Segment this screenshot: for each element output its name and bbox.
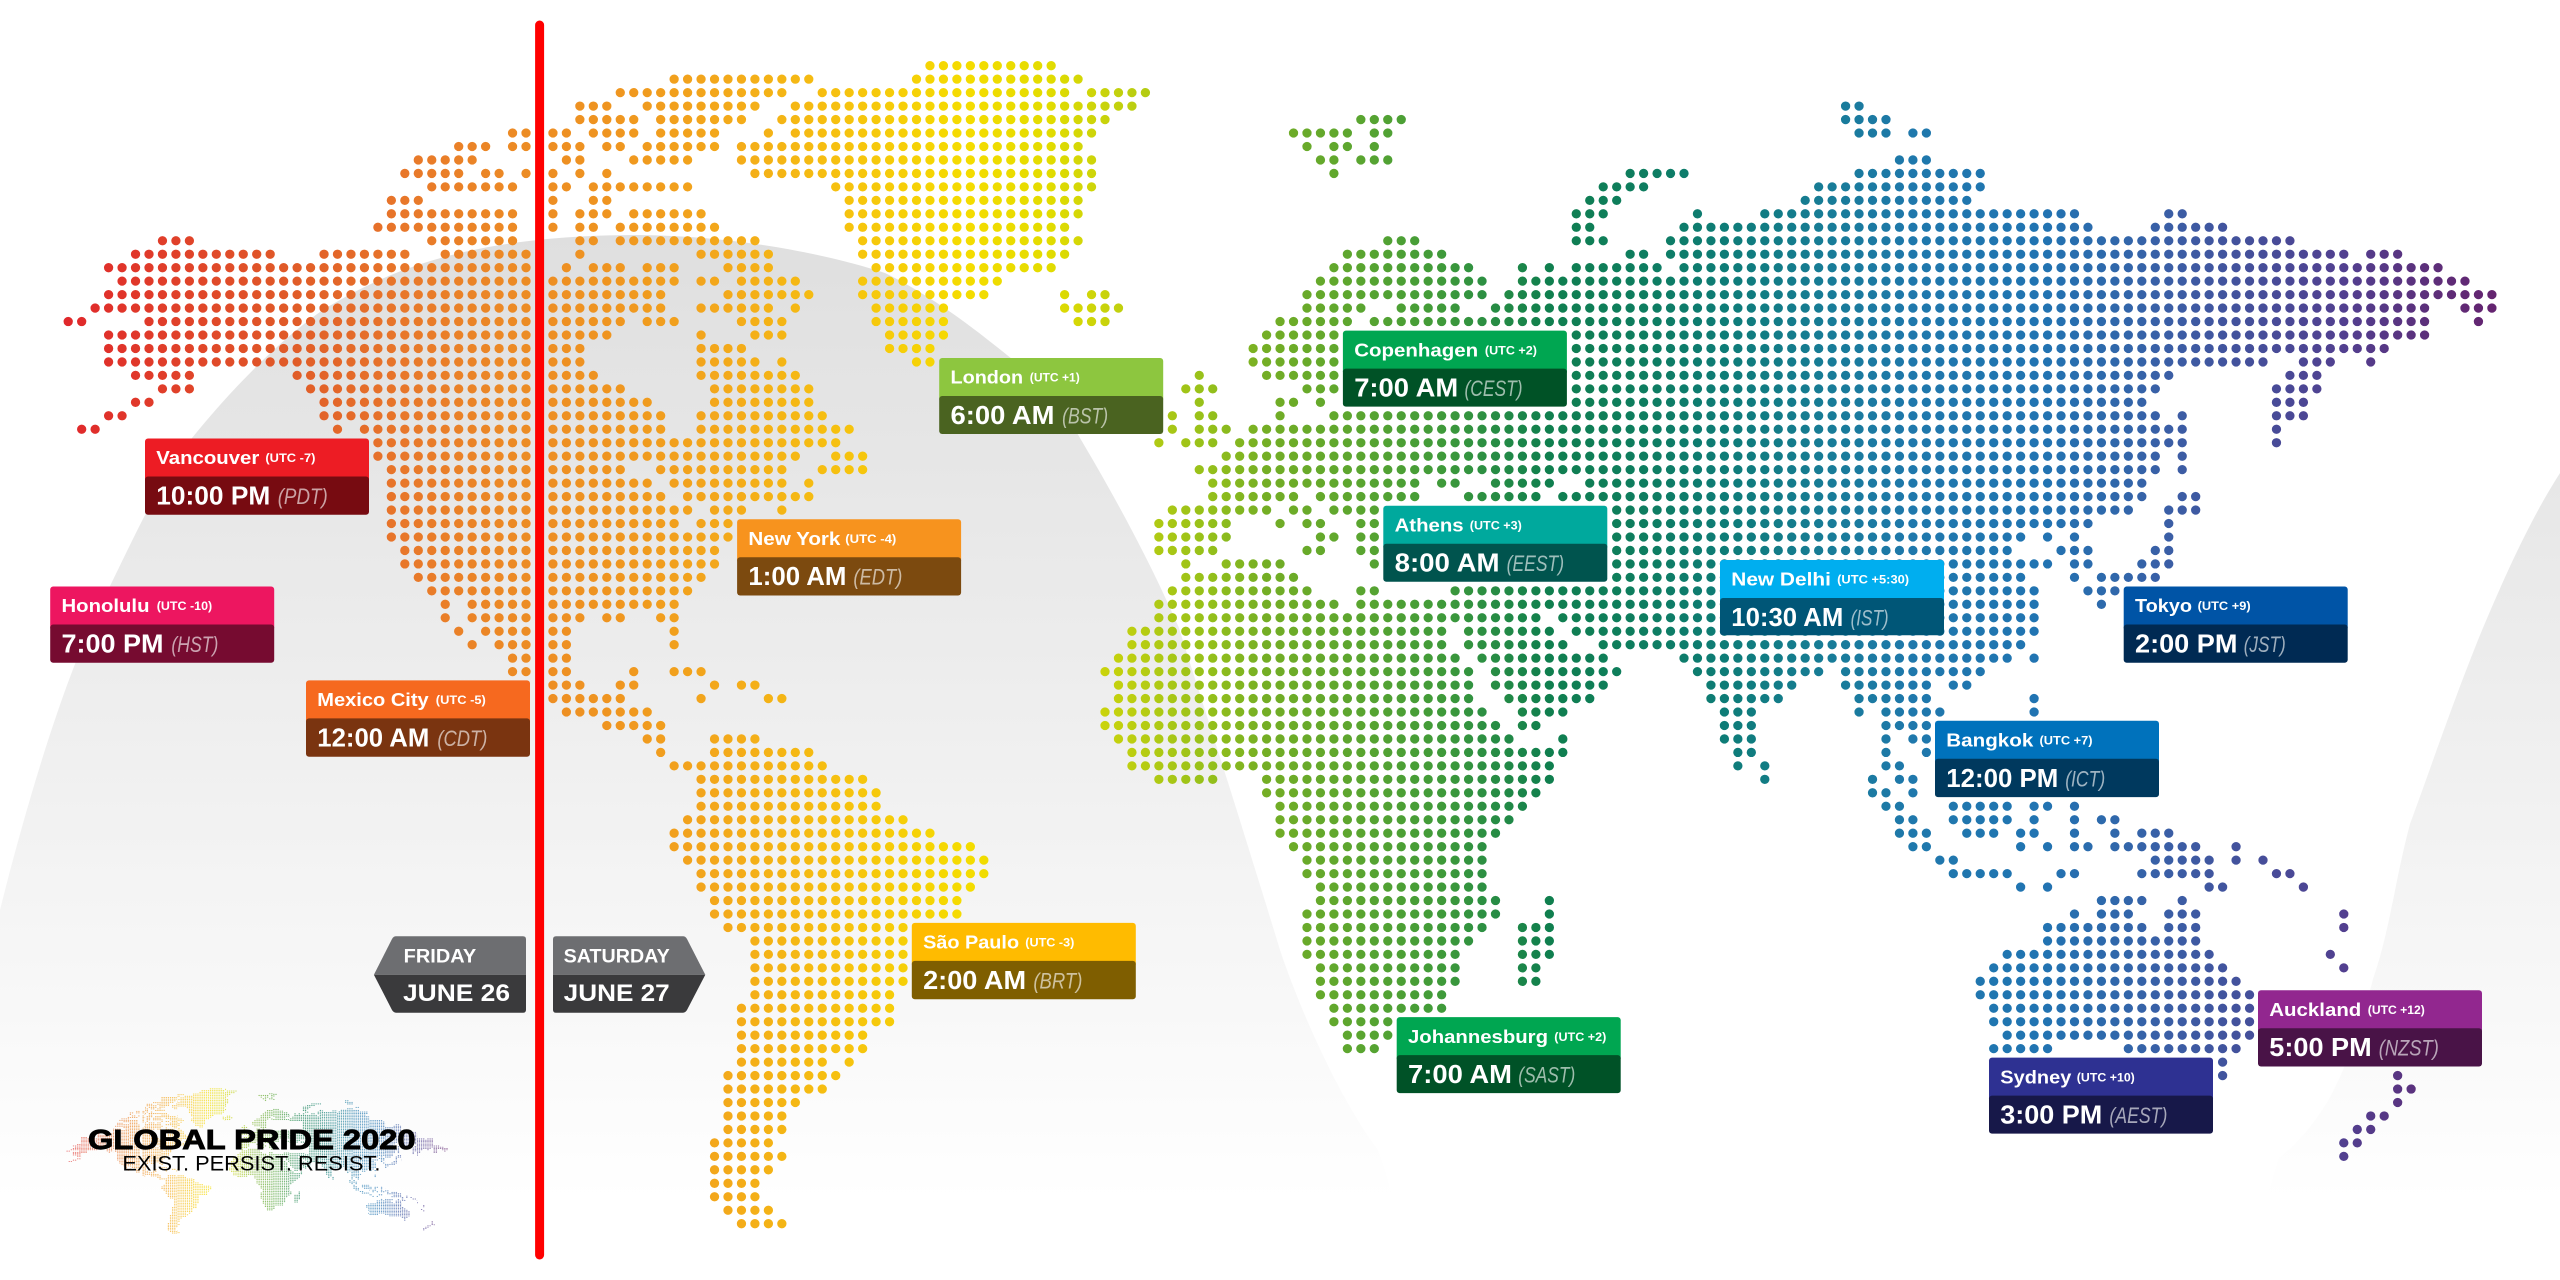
city header (1343, 331, 1567, 375)
label: Vancouver (145, 438, 369, 515)
local time (1397, 1055, 1621, 1093)
city header: (UTC +9) (2198, 599, 2251, 613)
city header: (UTC -7) (265, 451, 315, 465)
logo tagline: EXIST. PERSIST. RESIST. (122, 1153, 380, 1176)
background: daylight arc left (0, 235, 1420, 1280)
city header: Copenhagen (1354, 339, 1478, 360)
local time: 2:00 PM (2135, 628, 2237, 658)
local time: (HST) (171, 632, 218, 657)
label: Athens (1383, 506, 1607, 582)
city header: Mexico City (317, 689, 429, 710)
local time: (BRT) (1033, 968, 1082, 993)
local time: (NZST) (2379, 1036, 2439, 1061)
city header: (UTC +10) (2077, 1070, 2135, 1084)
city header (912, 923, 1136, 967)
local time (1989, 1096, 2213, 1134)
local time: (PDT) (278, 484, 328, 509)
date tag: Saturday June 27: SATURDAY (564, 946, 670, 967)
label: New York (737, 519, 961, 596)
city header: Auckland (2269, 999, 2361, 1020)
label: Mexico City (306, 680, 530, 757)
local time: 10:30 AM (1731, 602, 1843, 632)
local time: (SAST) (1518, 1063, 1575, 1088)
city header: Tokyo (2135, 595, 2192, 616)
local time: (EEST) (1507, 551, 1564, 576)
city header: Athens (1395, 514, 1464, 535)
local time (912, 961, 1136, 999)
city header: New York (748, 528, 841, 549)
label: Tokyo (2124, 586, 2348, 663)
local time: 7:00 PM (62, 628, 164, 658)
local time: 1:00 AM (748, 561, 846, 591)
city header: Johannesburg (1408, 1026, 1548, 1047)
local time: 7:00 AM (1354, 373, 1458, 403)
local time: (ICT) (2065, 766, 2105, 791)
label: Bangkok (1935, 721, 2159, 797)
local time: 10:00 PM (156, 480, 270, 510)
logo title: GLOBAL PRIDE 2020 (88, 1124, 416, 1155)
city header (2124, 586, 2348, 630)
city header (737, 519, 961, 563)
date tag: Saturday June 27 (553, 936, 705, 1013)
city header (145, 438, 369, 482)
local time (1383, 544, 1607, 582)
city header: (UTC +5:30) (1837, 573, 1909, 587)
city header (1397, 1017, 1621, 1061)
logo: Global Pride 2020 (65, 1087, 449, 1238)
city header: São Paulo (923, 932, 1019, 953)
city header (939, 358, 1163, 402)
city header: Sydney (2000, 1066, 2072, 1087)
city header: London (951, 367, 1023, 388)
local time: (BST) (1062, 404, 1108, 428)
city header: (UTC +3) (1470, 518, 1522, 532)
label: Sydney (1989, 1058, 2213, 1134)
label: São Paulo (912, 923, 1136, 999)
local time: (JST) (2244, 632, 2286, 657)
local time: 12:00 PM (1946, 763, 2058, 793)
city header: New Delhi (1731, 569, 1831, 590)
local time: 6:00 AM (951, 400, 1055, 430)
local time (1935, 759, 2159, 797)
city header (50, 586, 274, 630)
date tag: Saturday June 27: JUNE 27 (564, 980, 670, 1007)
local time: 2:00 AM (923, 965, 1026, 995)
local time: (CEST) (1465, 376, 1523, 401)
city header (2258, 990, 2482, 1034)
city header: (UTC +2) (1554, 1030, 1606, 1044)
local time (1720, 598, 1944, 635)
city header: (UTC +1) (1030, 371, 1080, 385)
city header (1383, 506, 1607, 550)
city header: Honolulu (62, 595, 150, 616)
local time (1343, 369, 1567, 407)
city header (1720, 560, 1944, 604)
city header: (UTC +12) (2368, 1003, 2425, 1017)
local time: 3:00 PM (2000, 1100, 2102, 1130)
date tag: Friday June 26: FRIDAY (404, 946, 477, 967)
label: Auckland (2258, 990, 2482, 1066)
local time: (CDT) (437, 726, 487, 751)
logo globe: curved dotted map (65, 1087, 449, 1238)
city header: Vancouver (156, 447, 259, 468)
local time: (AEST) (2109, 1103, 2167, 1128)
local time: 7:00 AM (1408, 1059, 1512, 1089)
city header (1935, 721, 2159, 765)
date tag: Friday June 26 (374, 936, 526, 1013)
label: Johannesburg (1397, 1017, 1621, 1093)
label: London (939, 358, 1163, 434)
city header: (UTC -5) (436, 693, 486, 707)
background: daylight arc right (2240, 473, 2560, 1280)
local time: 8:00 AM (1395, 548, 1500, 578)
city header: (UTC +7) (2040, 733, 2093, 747)
city header (1989, 1058, 2213, 1102)
city header: (UTC -10) (157, 599, 212, 613)
local time (939, 396, 1163, 434)
local time (2258, 1028, 2482, 1066)
label: New Delhi (1720, 560, 1944, 635)
city header: (UTC +2) (1485, 343, 1537, 357)
local time: 5:00 PM (2269, 1032, 2372, 1062)
label: Honolulu (50, 586, 274, 663)
city header (306, 680, 530, 724)
local time: (IST) (1851, 606, 1889, 630)
local time (737, 557, 961, 596)
local time (145, 476, 369, 515)
date line (535, 25, 544, 1255)
local time (306, 718, 530, 757)
local time: 12:00 AM (317, 722, 429, 752)
local time: (EDT) (853, 565, 902, 590)
city header: (UTC -4) (845, 532, 896, 546)
label: Copenhagen (1343, 331, 1567, 407)
city header: (UTC -3) (1025, 936, 1074, 950)
local time (2124, 624, 2348, 663)
local time (50, 624, 274, 663)
city header: Bangkok (1946, 729, 2034, 750)
date tag: Friday June 26: JUNE 26 (403, 980, 510, 1007)
